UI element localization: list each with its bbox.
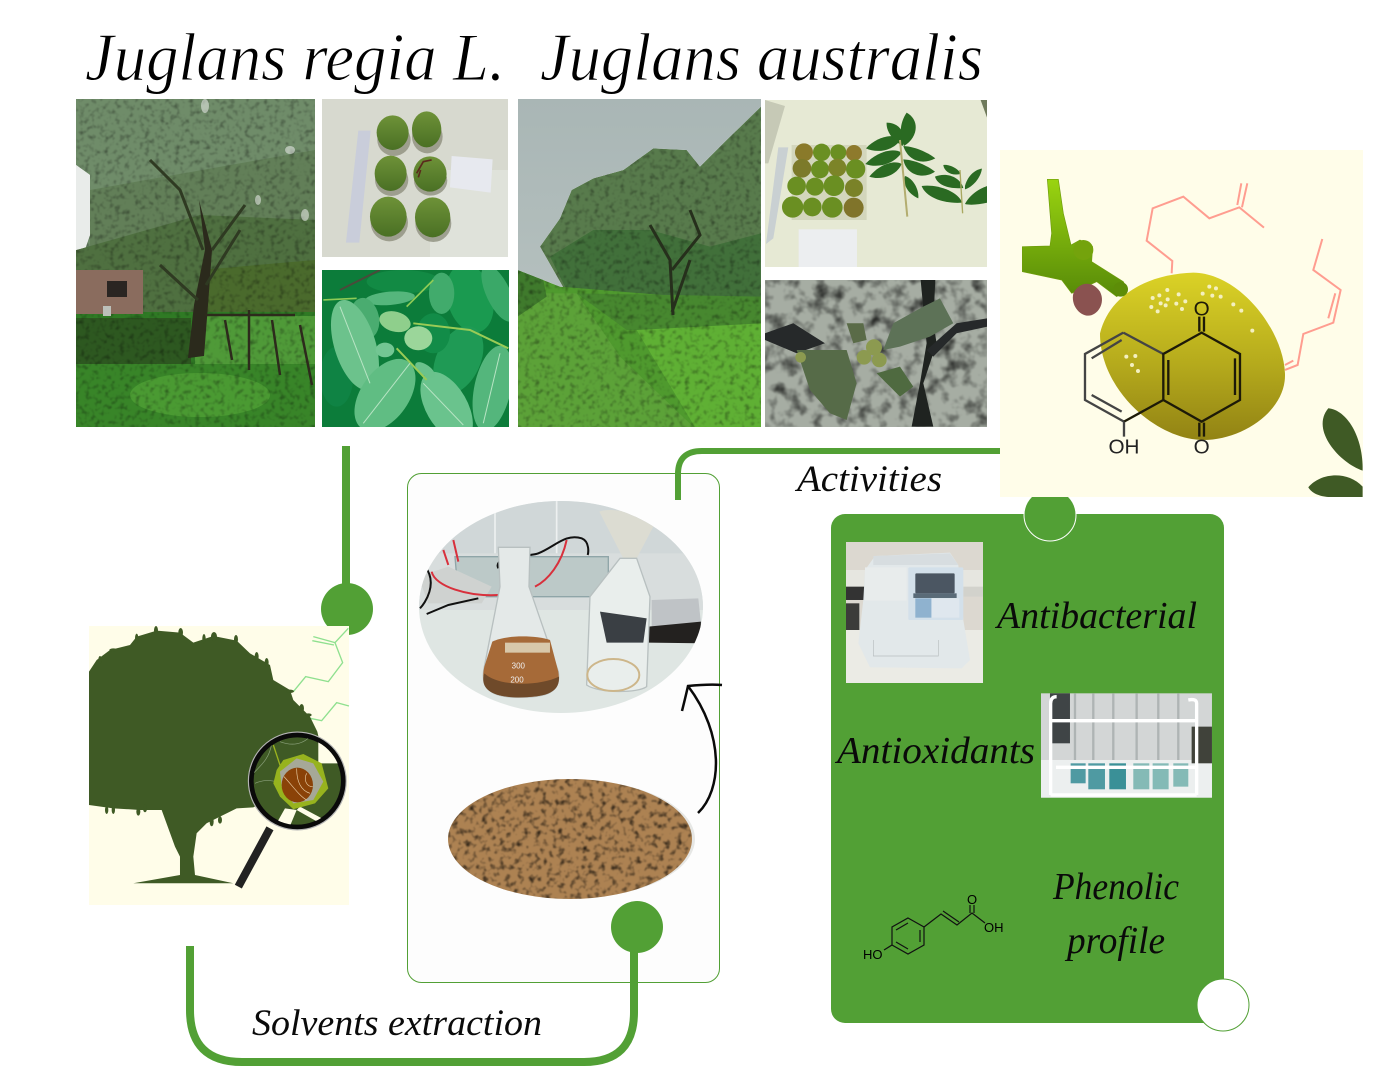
title: Juglans regia L.: [85, 19, 505, 95]
label: Solvents extraction: Solvents extraction: [252, 1003, 542, 1044]
photo: test tubes in a rack: [1041, 693, 1212, 798]
ruler: [346, 131, 371, 243]
conical flask: [483, 547, 559, 697]
photo: Juglans regia fruits with ruler: [322, 99, 508, 257]
panel: tree with magnifying glass: [89, 626, 349, 905]
chemical structure: phenolic acid: [863, 892, 1004, 962]
label: Antibacterial: Antibacterial: [994, 595, 1197, 637]
connector line: solvents extraction: [190, 945, 634, 1062]
node: activities card circle: [1024, 489, 1076, 541]
funnel and bottle: [599, 510, 653, 558]
photo: plate reader instrument: [846, 542, 983, 683]
connector line: activities: [678, 451, 1005, 500]
tree silhouette: [89, 626, 322, 883]
stem: [1022, 179, 1128, 297]
node: card corner circle: [1197, 979, 1249, 1031]
chemical structure: phenolic acid: HO: [863, 947, 882, 962]
photo: flasks on the lab bench: 300: [512, 661, 526, 670]
ruler: [766, 147, 788, 244]
photo: flasks on the lab bench: 200: [510, 676, 524, 685]
photo: Juglans australis fruits and leaves: [765, 100, 987, 268]
leaves: [1308, 408, 1363, 497]
panel: juglone over walnut fruit: [1000, 150, 1363, 497]
juglone structure: O: [1194, 298, 1210, 321]
label: Phenolic profile: Phenolic: [1052, 866, 1179, 908]
panel: activities card: [831, 514, 1224, 1023]
juglone structure: OH: [1108, 435, 1139, 458]
title: [85, 19, 983, 95]
chemical structure: phenolic acid: O: [967, 892, 977, 907]
arrow: [682, 685, 722, 813]
photo: Juglans regia tree: [76, 99, 315, 428]
photo: Juglans australis tree on a field: [518, 99, 763, 430]
label paper: [799, 229, 857, 268]
label: Phenolic profile: [1052, 866, 1179, 962]
chemical structure: phenolic acid: OH: [984, 920, 1004, 935]
foil: [652, 598, 701, 627]
photo: Juglans australis branch with fruits: [765, 280, 987, 427]
salmon molecule lines: [1147, 183, 1341, 370]
panel: extraction: [408, 474, 722, 982]
molecule lines: [293, 628, 349, 721]
walnut fruit: [1100, 273, 1285, 440]
node: tree connector circle: [321, 583, 373, 635]
juglone structure: [1085, 298, 1240, 458]
node: extraction circle: [611, 901, 663, 953]
photo: crushed walnut husk: [445, 775, 700, 903]
juglone structure: O: [1194, 435, 1210, 458]
label: Antioxidants: Antioxidants: [834, 730, 1035, 772]
photo: walnut leaves and green fruits: [322, 270, 509, 427]
label: Activities: Activities: [794, 459, 942, 500]
photo: flasks on the lab bench: [415, 497, 708, 720]
title: Juglans australis: [540, 19, 983, 95]
label paper: [450, 156, 493, 193]
magnifying glass: [238, 732, 346, 887]
label: Phenolic profile: profile: [1064, 920, 1165, 962]
connector line from photos to tree panel: [342, 446, 350, 592]
